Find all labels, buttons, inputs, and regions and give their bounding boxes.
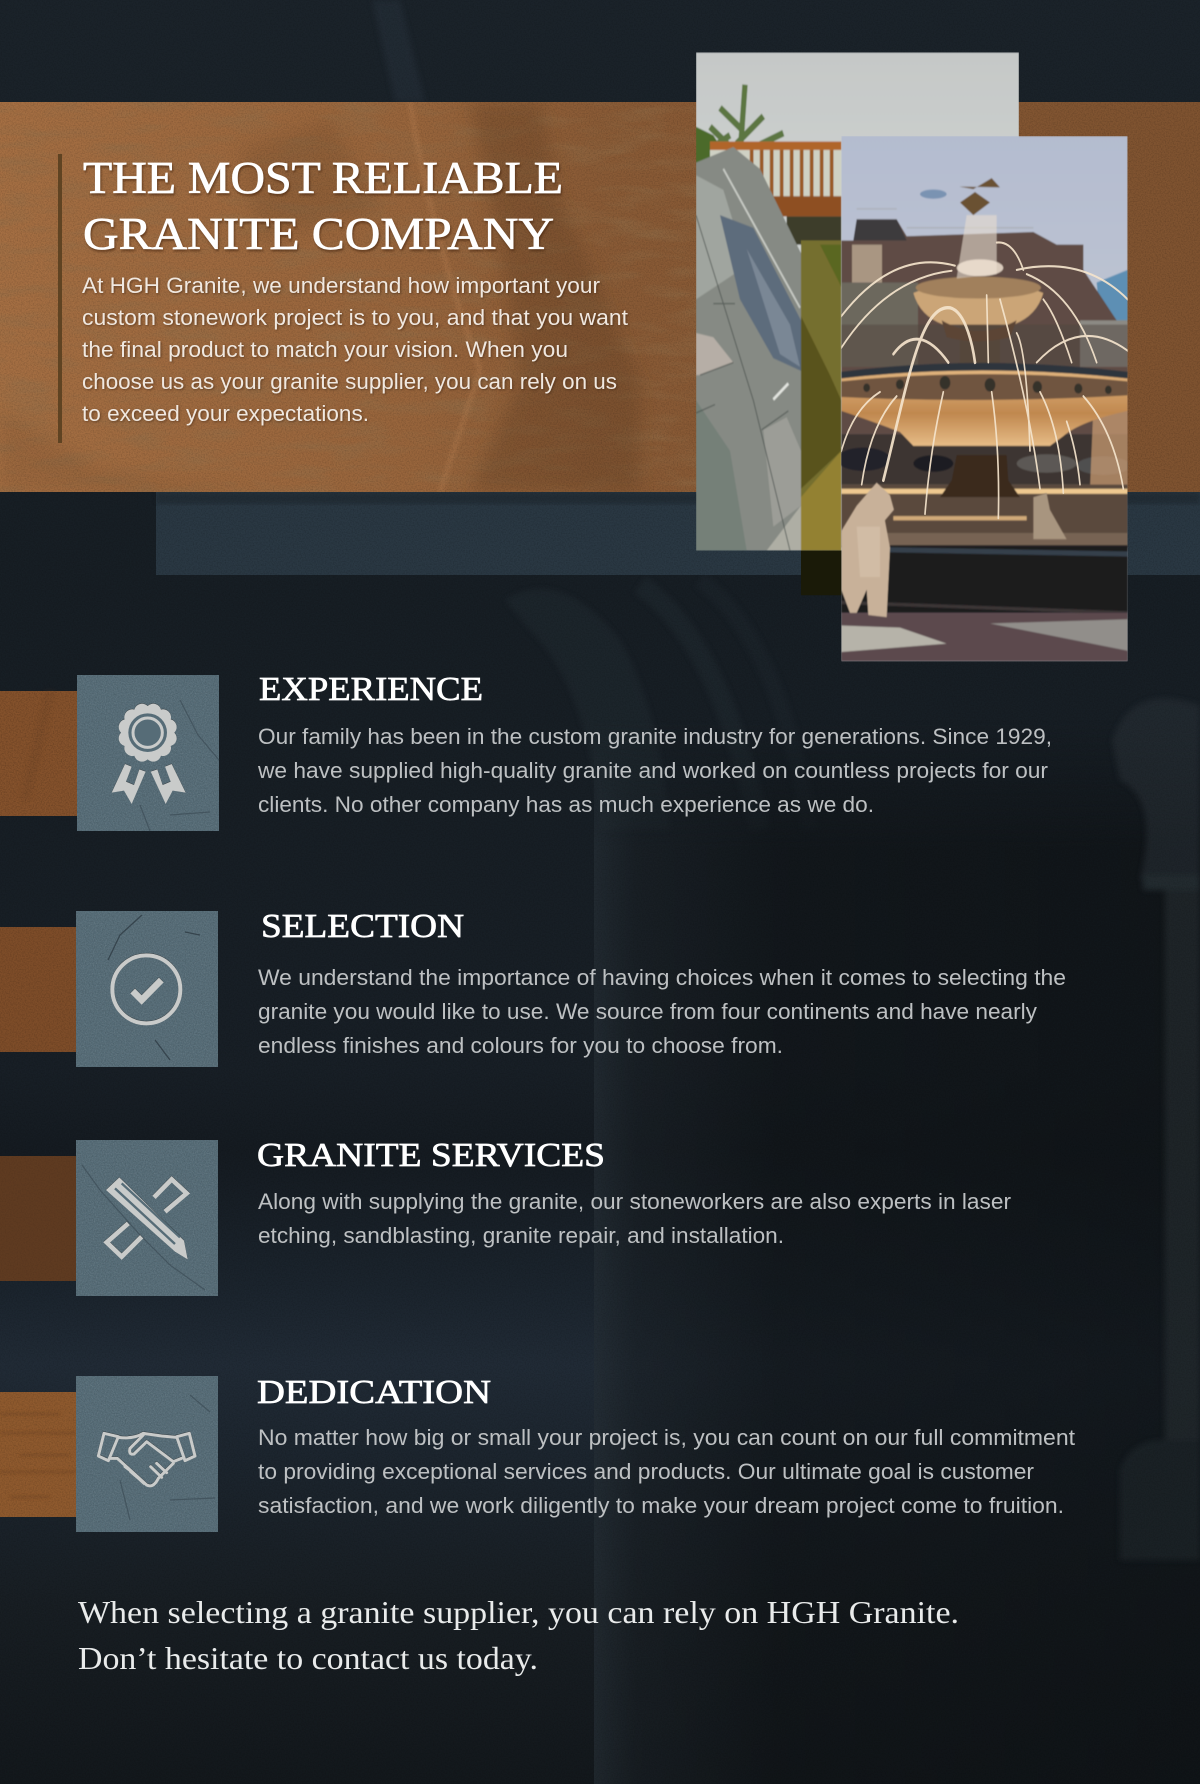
closing call to action: When selecting a granite supplier, you can rely on HGH Granite. bbox=[78, 1594, 959, 1630]
hero intro text: to exceed your expectations. bbox=[82, 401, 369, 426]
section 3 body text: Along with supplying the granite, our stoneworkers are also experts in laser bbox=[258, 1189, 1011, 1214]
copper hero band bbox=[0, 102, 1200, 492]
section 3 body text bbox=[258, 1189, 1011, 1248]
icon tile: pencil and ruler bbox=[76, 1140, 218, 1296]
hero intro text bbox=[82, 273, 629, 426]
section 2 body text bbox=[258, 965, 1066, 1058]
photo: illuminated fountain bbox=[837, 136, 1130, 661]
background right column bbox=[1112, 698, 1200, 1560]
section 3 heading: GRANITE SERVICES bbox=[257, 1137, 605, 1174]
hero intro text: the final product to match your vision. When you bbox=[82, 337, 568, 362]
section 3 copper tab bbox=[0, 1156, 76, 1281]
icon tile: check mark bbox=[76, 911, 218, 1067]
section 1 body text bbox=[257, 724, 1052, 817]
icon tile: handshake bbox=[76, 1376, 218, 1532]
section 2 body text: endless finishes and colours for you to choose from. bbox=[258, 1033, 783, 1058]
section 2 heading: SELECTION bbox=[261, 908, 464, 945]
hero title: GRANITE COMPANY bbox=[83, 209, 554, 259]
section 1 heading: EXPERIENCE bbox=[259, 671, 483, 708]
hero intro text: At HGH Granite, we understand how important your bbox=[82, 273, 600, 298]
closing call to action: Don’t hesitate to contact us today. bbox=[78, 1640, 538, 1676]
hero accent bar bbox=[58, 154, 62, 443]
section 4 body text: satisfaction, and we work diligently to make your dream project come to fruition. bbox=[258, 1493, 1064, 1518]
photo: granite wall and bridge bbox=[696, 52, 1019, 595]
hero intro text: custom stonework project is to you, and that you want bbox=[82, 305, 629, 330]
section 1 body text: Our family has been in the custom granite industry for generations. Since 1929, bbox=[258, 724, 1052, 749]
icon tile: award ribbon bbox=[77, 675, 219, 831]
closing call to action bbox=[78, 1594, 959, 1676]
section 1 body text: we have supplied high-quality granite and worked on countless projects for our bbox=[257, 758, 1049, 783]
hero intro text: choose us as your granite supplier, you can rely on us bbox=[82, 369, 617, 394]
hero title bbox=[83, 153, 563, 259]
section 4 wood tab bbox=[0, 1392, 76, 1517]
blue-grey offset band bbox=[156, 492, 1200, 575]
section 4 body text: to providing exceptional services and products. Our ultimate goal is customer bbox=[258, 1459, 1034, 1484]
section 4 body text: No matter how big or small your project is, you can count on our full commitment bbox=[258, 1425, 1076, 1450]
background stone arch bbox=[505, 580, 810, 830]
section 1 copper tab bbox=[0, 691, 77, 816]
section 2 body text: granite you would like to use. We source from four continents and have nearly bbox=[258, 999, 1038, 1024]
section 2 copper tab bbox=[0, 927, 76, 1052]
hero title: THE MOST RELIABLE bbox=[83, 153, 563, 203]
section 3 body text: etching, sandblasting, granite repair, and installation. bbox=[258, 1223, 784, 1248]
section 2 body text: We understand the importance of having choices when it comes to selecting the bbox=[258, 965, 1066, 990]
section 4 body text bbox=[258, 1425, 1076, 1518]
section 4 heading: DEDICATION bbox=[257, 1374, 491, 1411]
section 1 body text: clients. No other company has as much experience as we do. bbox=[258, 792, 874, 817]
